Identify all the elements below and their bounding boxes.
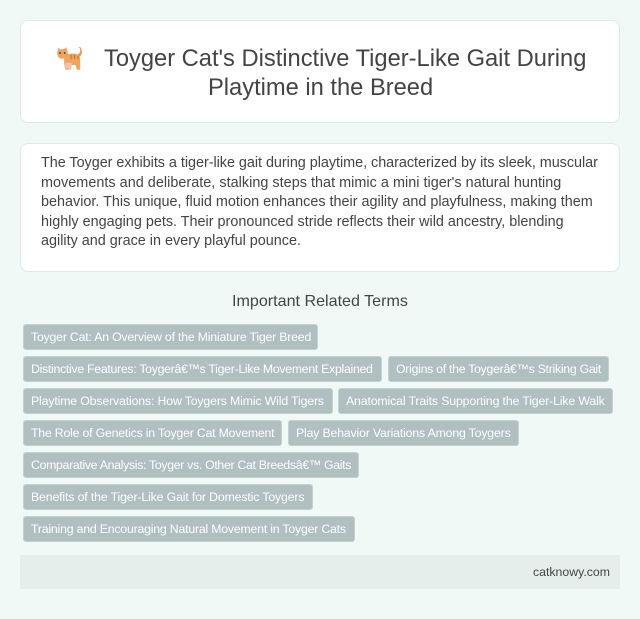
description text: highly engaging pets. Their pronounced stride reflects their wild ancestry, blending	[41, 214, 564, 230]
tag	[23, 324, 318, 350]
description card	[20, 143, 620, 272]
heading: related terms: Important Related Terms	[232, 292, 408, 310]
tag	[23, 484, 313, 510]
tag: Origins of the Toygerâ€™s Striking Gait	[396, 362, 601, 376]
tag: Benefits of the Tiger-Like Gait for Domestic Toygers	[31, 490, 304, 504]
header card	[20, 20, 620, 123]
tag: The Role of Genetics in Toyger Cat Movement	[31, 426, 274, 440]
tag: Distinctive Features: Toygerâ€™s Tiger-Like Movement Explained	[31, 362, 373, 376]
related term tags	[23, 324, 613, 542]
tag	[23, 516, 355, 542]
tag	[338, 388, 613, 414]
tag: Anatomical Traits Supporting the Tiger-Like Walk	[346, 394, 605, 408]
title: Toyger Cat's Distinctive Tiger-Like Gait During	[104, 46, 586, 72]
tag	[23, 356, 382, 382]
tag	[23, 420, 282, 446]
description text: The Toyger exhibits a tiger-like gait during playtime, characterized by its sleek, muscular	[41, 155, 598, 171]
tag	[288, 420, 519, 446]
title	[104, 46, 586, 101]
title: Playtime in the Breed	[208, 75, 433, 101]
footer bar	[20, 555, 620, 589]
tag	[388, 356, 609, 382]
tag: Playtime Observations: How Toygers Mimic Wild Tigers	[31, 394, 324, 408]
tag: Toyger Cat: An Overview of the Miniature Tiger Breed	[31, 330, 311, 344]
tag: Training and Encouraging Natural Movement in Toyger Cats	[31, 522, 346, 536]
tag: Comparative Analysis: Toyger vs. Other Cat Breedsâ€™ Gaits	[31, 458, 351, 472]
tag: Play Behavior Variations Among Toygers	[296, 426, 511, 440]
description text: behavior. This unique, fluid motion enhances their agility and playfulness, making them	[41, 194, 593, 210]
footer text: catknowy.com	[533, 565, 610, 579]
tag	[23, 388, 333, 414]
icon: cat	[57, 46, 82, 70]
description text: movements and deliberate, stalking steps that mimic a mini tiger's natural hunting	[41, 174, 561, 190]
description text	[41, 155, 598, 249]
tag	[23, 452, 359, 478]
description text: agility and grace in every playful pounce.	[41, 233, 301, 249]
